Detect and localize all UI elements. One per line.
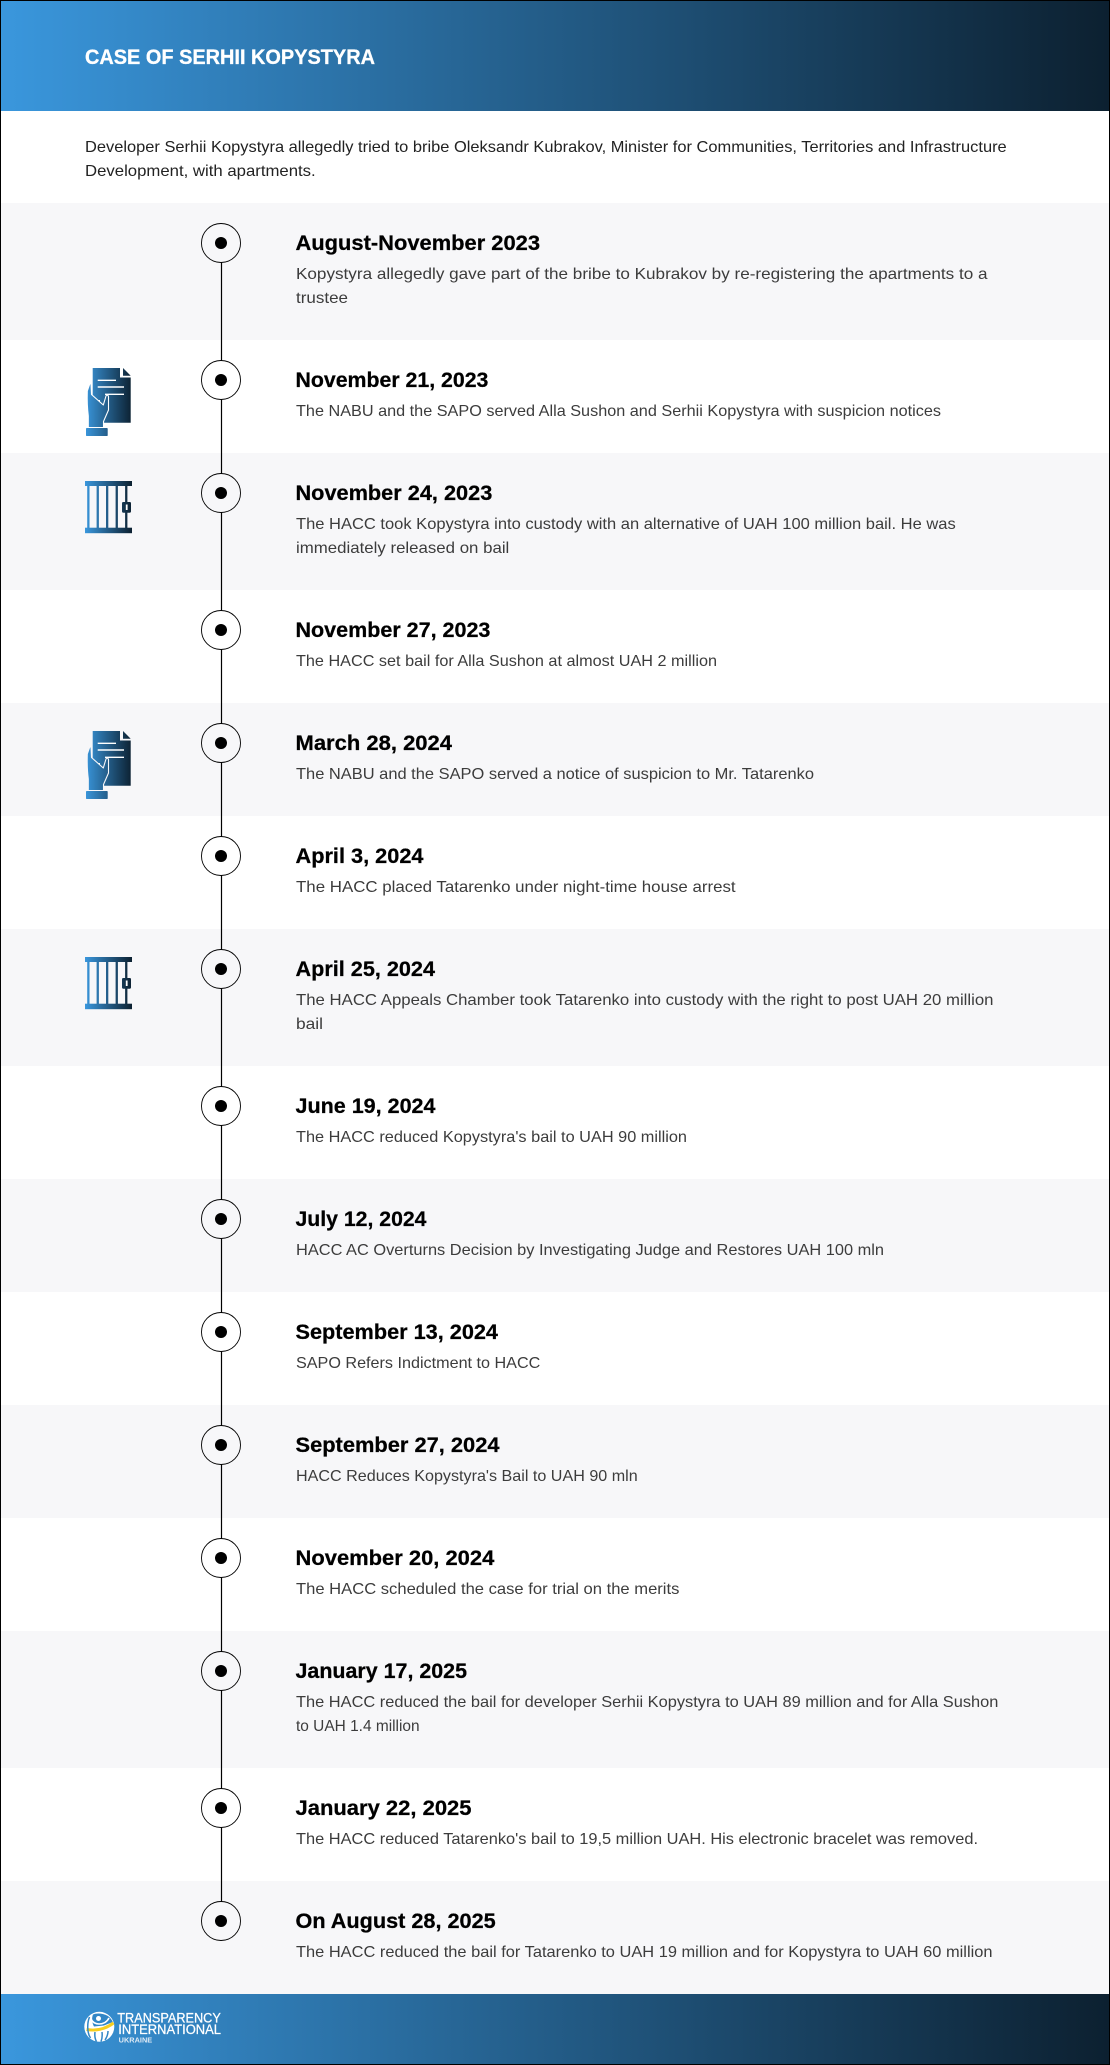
date: April 25, 2024 [296,958,435,981]
intro text: Development, with apartments. [85,163,316,180]
intro text [85,139,1007,180]
description: The HACC reduced the bail for developer Serhii Kopystyra to UAH 89 million and for Alla Sushon [296,1694,998,1711]
row: January 17, 2025 [0,1631,1110,1768]
description: The HACC reduced the bail for Tatarenko to UAH 19 million and for Kopystyra to UAH 60 million [296,1944,992,1961]
date: November 21, 2023 [296,369,488,392]
description: HACC Reduces Kopystyra's Bail to UAH 90 mln [296,1468,638,1485]
date: June 19, 2024 [296,1095,436,1118]
date: November 20, 2024 [296,1547,495,1570]
description: The HACC set bail for Alla Sushon at almost UAH 2 million [296,653,717,670]
icon: globe [84,2012,114,2042]
row: September 27, 2024 [0,1405,1110,1518]
title: CASE OF SERHII KOPYSTYRA [85,46,375,69]
date: On August 28, 2025 [296,1910,496,1933]
date: July 12, 2024 [296,1208,427,1231]
description: SAPO Refers Indictment to HACC [296,1355,540,1372]
description [296,992,994,1033]
footer banner [0,1994,1110,2065]
description: The HACC scheduled the case for trial on the merits [296,1581,679,1598]
description: to UAH 1.4 million [296,1718,420,1735]
description: The HACC took Kopystyra into custody with an alternative of UAH 100 million bail. He was [296,516,956,533]
row: November 20, 2024 [0,1518,1110,1631]
row: November 27, 2023 [0,590,1110,703]
row: April 3, 2024 [0,816,1110,929]
logo: Transparency International Ukraine [84,2010,221,2045]
row: June 19, 2024 [0,1066,1110,1179]
description: HACC AC Overturns Decision by Investigating Judge and Restores UAH 100 mln [296,1242,884,1259]
description [296,1694,998,1735]
row: September 13, 2024 [0,1292,1110,1405]
header banner [0,0,1110,111]
icon: document in hand [86,368,131,436]
description: bail [296,1016,323,1033]
description: Kopystyra allegedly gave part of the bribe to Kubrakov by re-registering the apartments to a [296,266,988,283]
date: August-November 2023 [296,232,540,255]
date: January 17, 2025 [296,1660,467,1683]
date: November 24, 2023 [296,482,492,505]
description: The HACC reduced Kopystyra's bail to UAH 90 million [296,1129,687,1146]
description: The HACC reduced Tatarenko's bail to 19,5 million UAH. His electronic bracelet was removed. [296,1831,978,1848]
row: April 25, 2024 [0,929,1110,1066]
date: March 28, 2024 [296,732,452,755]
logo: Transparency International Ukraine: TRANSPARENCY [117,2010,221,2025]
icon: document in hand [86,731,131,799]
row: March 28, 2024 [0,703,1110,816]
description: The NABU and the SAPO served Alla Sushon and Serhii Kopystyra with suspicion notices [296,403,941,420]
description [296,266,988,307]
date: September 27, 2024 [296,1434,500,1457]
row: August-November 2023 [0,203,1110,340]
logo: Transparency International Ukraine: INTERNATIONAL [118,2022,221,2037]
icon: jail bars [85,481,132,533]
description: immediately released on bail [296,540,509,557]
description: The HACC placed Tatarenko under night-time house arrest [296,879,736,896]
description: The HACC Appeals Chamber took Tatarenko into custody with the right to post UAH 20 million [296,992,994,1009]
description: trustee [296,290,348,307]
description: The NABU and the SAPO served a notice of suspicion to Mr. Tatarenko [296,766,814,783]
date: January 22, 2025 [296,1797,472,1820]
date: April 3, 2024 [296,845,424,868]
date: November 27, 2023 [296,619,490,642]
timeline line with markers [202,224,240,1940]
description [296,516,956,557]
logo: Transparency International Ukraine: UKRAINE [119,2038,153,2045]
intro text: Developer Serhii Kopystyra allegedly tried to bribe Oleksandr Kubrakov, Minister for Communities, Territories and Infrastructure [85,139,1007,156]
row: July 12, 2024 [0,1179,1110,1292]
row: January 22, 2025 [0,1768,1110,1881]
row: November 24, 2023 [0,453,1110,590]
date: September 13, 2024 [296,1321,498,1344]
row: November 21, 2023 [0,340,1110,453]
row: On August 28, 2025 [0,1881,1110,1994]
icon: jail bars [85,957,132,1009]
